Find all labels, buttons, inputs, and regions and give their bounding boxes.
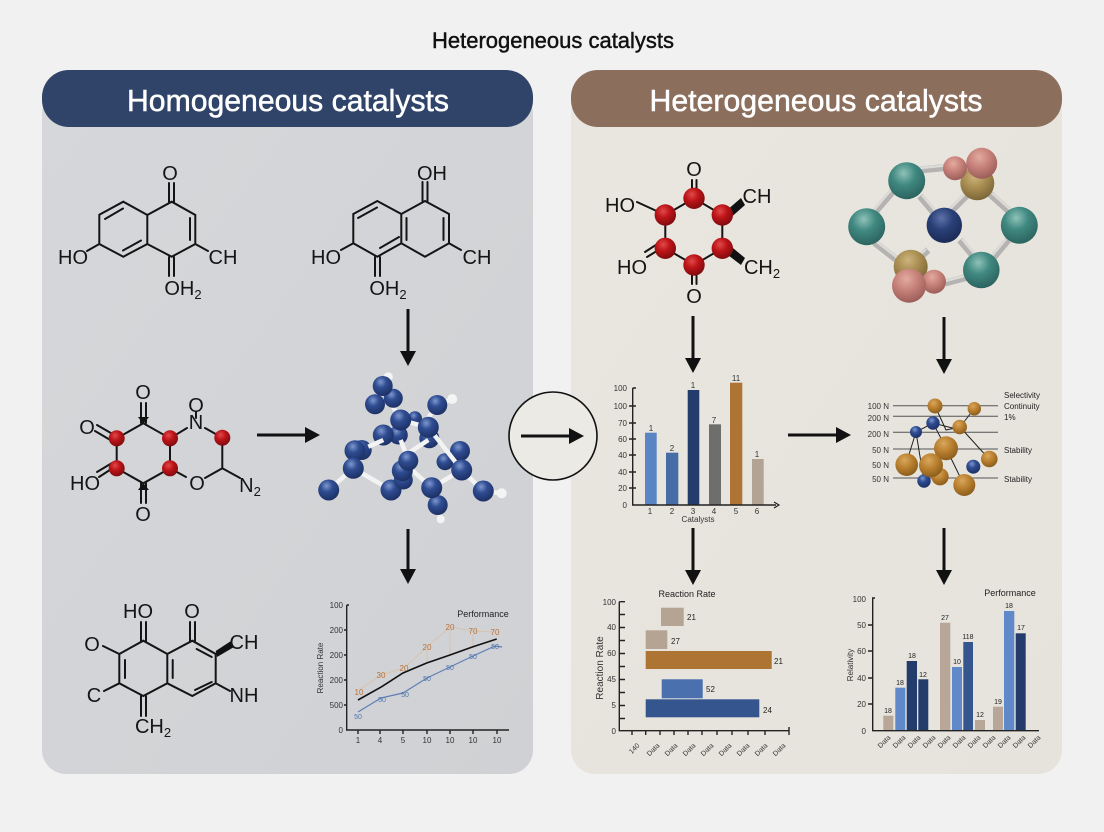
line chart: performance: Performance	[457, 609, 509, 619]
bar chart: catalysts: 6	[755, 507, 760, 516]
molecule 2: HO	[311, 247, 341, 269]
red ring molecule: 2	[773, 266, 780, 281]
bar chart: catalysts: 40	[618, 468, 628, 477]
grouped bar chart: performance: Data	[1012, 734, 1027, 750]
molecule 3: O	[79, 417, 95, 439]
grouped bar chart: performance: Data	[922, 734, 937, 750]
red ring molecule: O	[686, 286, 702, 308]
molecule 1	[58, 163, 237, 302]
molecule 3: 2	[254, 484, 261, 499]
horizontal bar chart: reaction rate: Data	[646, 742, 661, 758]
horizontal bar chart: reaction rate: Reaction Rate	[595, 636, 606, 700]
molecule 2: OH	[369, 278, 399, 300]
molecule 1: OH	[164, 278, 194, 300]
red ring molecule: CH	[744, 257, 773, 279]
grouped bar chart: performance: 12	[919, 672, 927, 679]
line chart: performance: 10	[355, 688, 364, 697]
molecule 4: CH	[135, 716, 164, 738]
bar chart: catalysts: 20	[618, 484, 628, 493]
horizontal bar chart: reaction rate: Data	[754, 742, 769, 758]
line chart: performance: 30	[377, 671, 386, 680]
horizontal bar chart: reaction rate: 21	[687, 613, 696, 622]
bar chart: catalysts: 5	[734, 507, 739, 516]
bar chart: catalysts: 70	[618, 419, 628, 428]
orbital diagram: selectivity and stability: 100 N	[868, 402, 889, 411]
line chart: performance: 50	[354, 714, 362, 721]
horizontal bar chart: reaction rate: 27	[671, 637, 680, 646]
molecule 3: O	[188, 395, 204, 417]
bar chart: catalysts: 1	[648, 507, 653, 516]
orbital diagram: selectivity and stability: Stability	[1004, 475, 1032, 484]
bar chart: catalysts: 0	[623, 501, 628, 510]
line chart: performance: 20	[400, 664, 409, 673]
molecule 4: HO	[123, 601, 153, 623]
horizontal bar chart: reaction rate: Data	[772, 742, 787, 758]
orbital diagram: selectivity and stability: Selectivity	[1004, 391, 1040, 400]
panel: heterogeneous catalysts	[571, 70, 1062, 774]
molecule 3: N	[239, 475, 254, 497]
grouped bar chart: performance	[846, 588, 1042, 750]
orbital diagram: selectivity and stability: 200 N	[868, 430, 889, 439]
bar chart: catalysts: 3	[691, 507, 696, 516]
line chart: performance: 50	[491, 644, 499, 651]
molecule 2: 2	[399, 287, 407, 302]
grouped bar chart: performance: Data	[937, 734, 952, 750]
molecule 2: CH	[463, 247, 491, 269]
heading: homogeneous catalysts	[42, 70, 533, 127]
molecule 4: C	[87, 685, 101, 707]
line chart: performance: 70	[491, 628, 500, 637]
grouped bar chart: performance: Data	[907, 734, 922, 750]
molecule 3	[70, 382, 261, 526]
line chart: performance: 50	[401, 692, 409, 699]
bar chart: catalysts: Catalysts	[682, 515, 714, 524]
grouped bar chart: performance: Relativity	[846, 649, 855, 681]
molecule 4: O	[84, 634, 100, 656]
molecule 4: CH	[230, 632, 258, 654]
molecule 1: 2	[194, 287, 202, 302]
line chart: performance: 50	[469, 654, 477, 661]
grouped bar chart: performance: 18	[908, 653, 916, 660]
grouped bar chart: performance: 100	[853, 595, 867, 604]
grouped bar chart: performance: 18	[884, 708, 892, 715]
horizontal bar chart: reaction rate: 45	[607, 675, 617, 684]
bar chart: catalysts: 60	[618, 435, 628, 444]
horizontal bar chart: reaction rate: 21	[774, 657, 783, 666]
line chart: performance: 5	[401, 736, 406, 745]
horizontal bar chart: reaction rate: 0	[612, 727, 617, 736]
arrow: ring molecule to bar chart	[685, 316, 701, 373]
arrow: orbital diagram to grouped chart	[936, 528, 952, 585]
arrow: bar chart to horizontal chart	[685, 528, 701, 585]
grouped bar chart: performance: 10	[953, 659, 961, 666]
molecule 1: CH	[209, 247, 237, 269]
line chart: performance: 70	[469, 627, 478, 636]
horizontal bar chart: reaction rate: Data	[664, 742, 679, 758]
orbital diagram: selectivity and stability: Continuity	[1004, 402, 1040, 411]
panel: homogeneous catalysts	[42, 70, 533, 774]
line chart: performance: 1	[356, 736, 361, 745]
orbital diagram: selectivity and stability: Stability	[1004, 446, 1032, 455]
grouped bar chart: performance: 12	[976, 712, 984, 719]
title: Heterogeneous catalysts	[432, 28, 674, 53]
orbital diagram: selectivity and stability	[868, 391, 1040, 496]
grouped bar chart: performance: 60	[857, 647, 867, 656]
line chart: performance: 50	[378, 697, 386, 704]
line chart: performance: 20	[423, 643, 432, 652]
molecule 2: OH	[417, 163, 447, 185]
grouped bar chart: performance: Data	[1027, 734, 1042, 750]
orbital diagram: selectivity and stability: 50 N	[872, 446, 889, 455]
grouped bar chart: performance: 18	[1005, 603, 1013, 610]
molecule 4	[84, 601, 258, 740]
molecule 3: O	[135, 382, 151, 404]
horizontal bar chart: reaction rate: Data	[682, 742, 697, 758]
molecule 1: HO	[58, 247, 88, 269]
bar chart: catalysts: 2	[670, 507, 675, 516]
grouped bar chart: performance: Data	[997, 734, 1012, 750]
bar chart: catalysts: 11	[732, 374, 741, 383]
bar chart: catalysts: 100	[614, 402, 628, 411]
red ring molecule: HO	[617, 257, 647, 279]
grouped bar chart: performance: Data	[877, 734, 892, 750]
grouped bar chart: performance: 118	[962, 634, 974, 641]
molecule 4: NH	[230, 685, 258, 707]
line chart: performance: Reaction Rate	[316, 642, 325, 693]
molecule 1: O	[162, 163, 178, 185]
bar chart: catalysts: 40	[618, 451, 628, 460]
grouped bar chart: performance: Data	[982, 734, 997, 750]
arrow: bar chart to orbital diagram	[788, 427, 851, 443]
line chart: performance: 200	[330, 626, 344, 635]
blue molecular cluster	[318, 372, 507, 523]
grouped bar chart: performance: 18	[896, 680, 904, 687]
grouped bar chart: performance: 0	[862, 727, 867, 736]
line chart: performance: 0	[339, 726, 344, 735]
bar chart: catalysts: 2	[670, 444, 675, 453]
line chart: performance: 4	[378, 736, 383, 745]
grouped bar chart: performance: 20	[857, 700, 867, 709]
grouped bar chart: performance: Data	[952, 734, 967, 750]
molecule 3: HO	[70, 473, 100, 495]
arrow: sphere molecule to orbital diagram	[936, 317, 952, 374]
horizontal bar chart: reaction rate: 60	[607, 649, 617, 658]
orbital diagram: selectivity and stability: 50 N	[872, 461, 889, 470]
heading: heterogeneous catalysts	[571, 70, 1062, 127]
molecule 2	[311, 163, 491, 302]
grouped bar chart: performance: Data	[892, 734, 907, 750]
molecule 4: 2	[164, 725, 171, 740]
heading: homogeneous catalysts: Homogeneous catalysts	[127, 83, 449, 118]
grouped bar chart: performance: Performance	[984, 588, 1036, 598]
horizontal bar chart: reaction rate: Reaction Rate	[658, 589, 716, 599]
bar chart: catalysts: 7	[712, 416, 717, 425]
arrow: molecule 2 to blue cluster	[400, 309, 416, 366]
grouped bar chart: performance: Data	[967, 734, 982, 750]
red ring molecule: HO	[605, 195, 635, 217]
horizontal bar chart: reaction rate: 5	[612, 701, 617, 710]
line chart: performance: 500	[330, 701, 344, 710]
arrow: cluster to line chart	[400, 529, 416, 584]
grouped bar chart: performance: 50	[857, 621, 867, 630]
horizontal bar chart: reaction rate	[595, 589, 789, 758]
bar chart: catalysts: 1	[691, 381, 696, 390]
bar chart: catalysts: 1	[649, 424, 654, 433]
line chart: performance: 20	[446, 623, 455, 632]
grouped bar chart: performance: 27	[941, 615, 949, 622]
line chart: performance: 50	[446, 665, 454, 672]
line chart: performance: 100	[330, 601, 344, 610]
molecule 3: O	[189, 473, 205, 495]
horizontal bar chart: reaction rate: 24	[763, 706, 772, 715]
orbital diagram: selectivity and stability: 50 N	[872, 475, 889, 484]
red ring molecule	[605, 159, 780, 308]
horizontal bar chart: reaction rate: 100	[603, 598, 617, 607]
red ring molecule: CH	[743, 186, 771, 208]
horizontal bar chart: reaction rate: 52	[706, 685, 715, 694]
molecule 3: O	[135, 504, 151, 526]
orbital diagram: selectivity and stability: 200 N	[868, 414, 889, 423]
bar chart: catalysts: 100	[614, 384, 628, 393]
line chart: performance	[316, 601, 509, 745]
molecule 3: N	[189, 412, 203, 434]
line chart: performance: 10	[446, 736, 455, 745]
line chart: performance: 10	[423, 736, 432, 745]
grouped bar chart: performance: 19	[994, 699, 1002, 706]
heading: heterogeneous catalysts: Heterogeneous catalysts	[650, 83, 982, 118]
bar chart: catalysts	[614, 374, 779, 524]
molecule 4: O	[184, 601, 200, 623]
horizontal bar chart: reaction rate: Data	[718, 742, 733, 758]
horizontal bar chart: reaction rate: Data	[736, 742, 751, 758]
grouped bar chart: performance: 17	[1017, 625, 1025, 632]
red ring molecule: O	[686, 159, 702, 181]
arrow: molecule 3 to blue cluster	[257, 427, 320, 443]
grouped bar chart: performance: 40	[857, 674, 867, 683]
horizontal bar chart: reaction rate: 40	[607, 623, 617, 632]
line chart: performance: 50	[423, 676, 431, 683]
bar chart: catalysts: 4	[712, 507, 717, 516]
central circle with arrow	[509, 392, 597, 480]
horizontal bar chart: reaction rate: Data	[700, 742, 715, 758]
line chart: performance: 10	[493, 736, 502, 745]
bar chart: catalysts: 1	[755, 450, 760, 459]
3D sphere molecule	[848, 148, 1038, 303]
orbital diagram: selectivity and stability: 1%	[1004, 413, 1016, 422]
horizontal bar chart: reaction rate: 140	[628, 742, 641, 756]
line chart: performance: 200	[330, 651, 344, 660]
line chart: performance: 200	[330, 676, 344, 685]
line chart: performance: 10	[469, 736, 478, 745]
